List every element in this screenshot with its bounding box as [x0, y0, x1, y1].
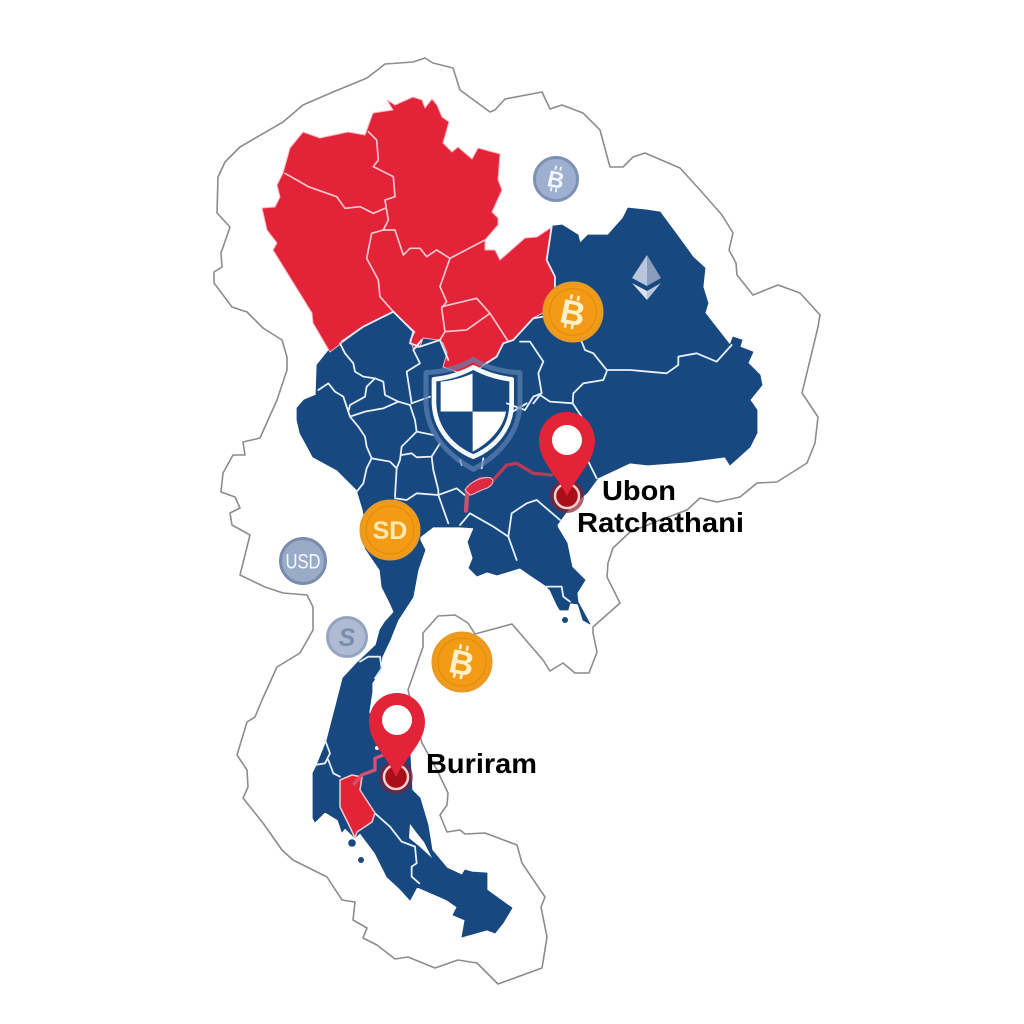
- gulf inlet in the south: [409, 824, 432, 858]
- icon: orange SD coin: SD: [373, 517, 407, 545]
- blue provinces of the map: [297, 208, 762, 937]
- icon: orange SD coin: [361, 501, 419, 559]
- red southern province: [340, 775, 375, 838]
- label: Ubon Ratchathani: Ratchathani: [577, 507, 744, 538]
- white notch beside southern pin: [375, 746, 379, 750]
- icon: security shield: [426, 359, 520, 469]
- icon: orange bitcoin coin south: [433, 633, 491, 691]
- shield outer glow outline: [426, 359, 520, 469]
- label: Buriram: Buriram: [426, 748, 537, 779]
- icon: faded dollar coin: S: [339, 624, 356, 652]
- label: Ubon Ratchathani: Ubon: [602, 475, 676, 506]
- red northern provinces: [262, 97, 555, 372]
- icon: location pin Ubon Ratchathani: [539, 412, 595, 513]
- icon: ethereum diamond: [632, 255, 661, 300]
- label: Ubon Ratchathani: [577, 475, 744, 538]
- icon: faded USD coin: USD: [286, 550, 320, 574]
- icon: faded bitcoin coin north: B: [545, 165, 567, 194]
- icon: location pin Buriram: [369, 693, 425, 794]
- icon: orange bitcoin coin north-east: B: [557, 292, 589, 335]
- icon: orange bitcoin coin south: B: [446, 642, 478, 685]
- white borders of blue provinces: [315, 227, 732, 883]
- northern red route: [465, 463, 552, 511]
- icon: faded bitcoin coin north: [534, 158, 578, 200]
- southern red route: [353, 755, 383, 785]
- outer grey boundary line: [214, 58, 820, 984]
- shield quarters: [441, 373, 506, 452]
- red province borders: [285, 132, 508, 342]
- small islands: [348, 617, 568, 863]
- icon: faded USD coin: [280, 538, 326, 584]
- shield white frame: [434, 367, 512, 457]
- icon: orange bitcoin coin north-east: [544, 283, 602, 341]
- icon: faded dollar coin: [328, 618, 366, 656]
